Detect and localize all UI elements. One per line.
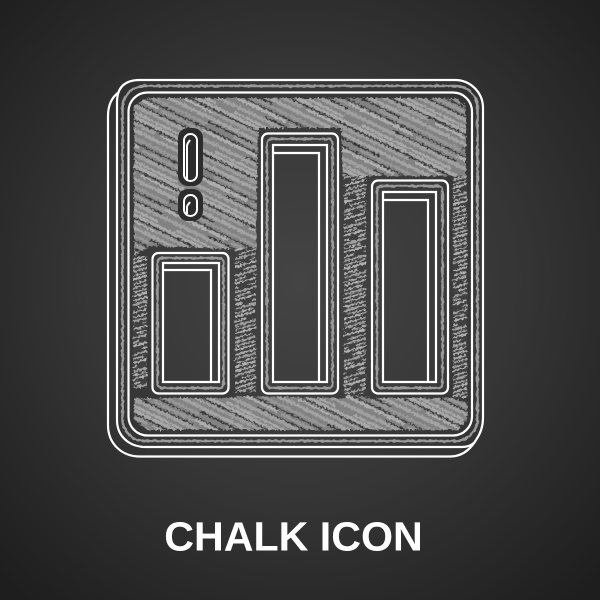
bar 1 <box>152 253 228 394</box>
chalk band: frame <box>122 86 478 441</box>
zigzag hatching: column right of third bar <box>453 176 467 398</box>
caption: CHALK ICON <box>164 514 423 560</box>
diagonal hatching: top and upper left <box>134 98 466 256</box>
chalk bands: bars <box>158 139 442 388</box>
zigzag hatching: column between first and second bar <box>235 248 256 392</box>
frame outlines <box>108 80 483 456</box>
bar 3 <box>372 180 448 394</box>
exclamation mark <box>184 134 197 216</box>
diagonal hatching: bottom band <box>134 394 467 430</box>
dark halo: exclamation <box>178 128 203 221</box>
zigzag hatching: column left of first bar <box>133 256 147 388</box>
icon: bar chart board <box>108 80 483 456</box>
zigzag hatching: column between second and third bar <box>344 176 366 394</box>
bar 2 <box>262 134 338 394</box>
